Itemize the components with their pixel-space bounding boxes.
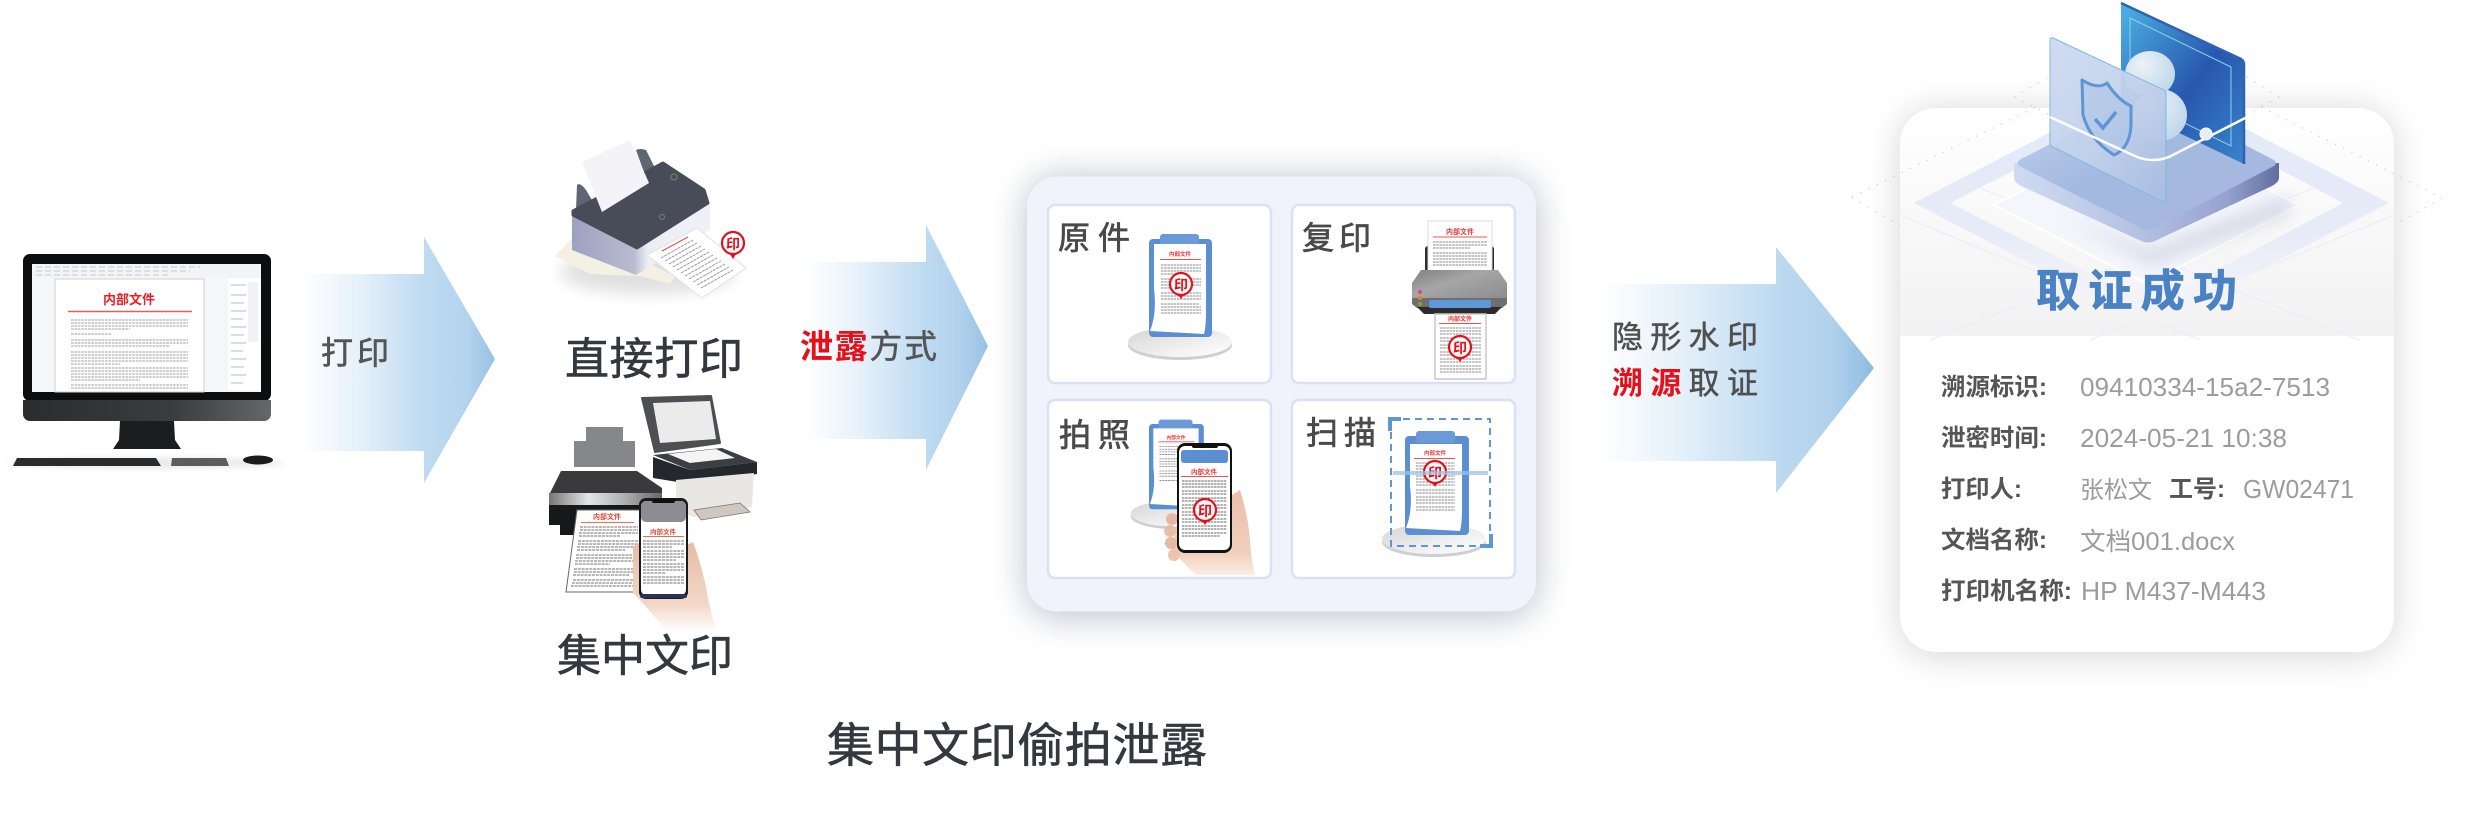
scanner tray [694,503,750,520]
direct print printer [555,140,746,298]
phone [639,498,688,599]
floating plate [1994,128,2299,284]
row: printer name: HP M437-M443 [2081,576,2266,606]
monitor chin [23,400,271,421]
dotted guide lines [1852,75,2442,226]
card body [1900,108,2394,652]
heading: central print photo leak: 集中文印偷拍泄露 [827,719,1207,772]
document title: 内部文件 [103,292,155,307]
clipboard on stand: 印 [1174,277,1188,293]
card label: 原件 [1058,220,1130,256]
large printer top [550,471,662,505]
card: photo [1048,400,1271,578]
card label: 拍照 [1059,417,1130,453]
scan corner bottom right [1480,534,1493,548]
row: printed by: 打印人: [1941,476,2022,503]
shield icon [2082,80,2131,155]
row: trace id [1941,372,2330,402]
card header [1900,108,2394,336]
trackpad [171,458,229,466]
row: printer name: 打印机名称: [1941,578,2072,605]
row: trace id: 溯源标识: [1941,374,2047,401]
desk shadow [6,457,286,469]
arrow label [1612,320,1758,401]
connection line [2050,112,2257,160]
dashed scan frame [1391,419,1490,546]
printed sheet [566,510,642,592]
row: leak time: 2024-05-21 10:38 [2080,423,2287,453]
watermark stamp [722,232,744,259]
connection node [2200,128,2212,140]
printed document [647,228,746,298]
phone [1177,443,1232,553]
row: leak time [1941,423,2287,453]
hand [1164,490,1255,575]
hand [633,542,717,632]
row: printed by [1941,474,2354,504]
sheet title: 内部文件 [593,512,621,521]
scanner glass [653,401,716,443]
arrow label: leak methods: 泄露方式 [800,328,937,365]
security illustration [1852,3,2442,340]
large printer band [549,493,662,507]
glass panel [2050,38,2166,202]
row: leak time: 泄密时间: [1941,424,2047,452]
clipboard behind phone [1131,420,1221,529]
panel shadow [1027,178,1536,616]
scan corner top left [1388,417,1401,431]
back panel [2121,3,2244,164]
line: traceability: 溯源取证 [1612,366,1758,401]
card: copy [1292,205,1515,383]
arrow: print [300,237,495,483]
platform [2014,96,2279,242]
phone: 内部文件 [1191,467,1218,476]
mouse [243,456,273,464]
phone title: 内部文件 [650,527,676,536]
row: printed by: 张松文 [2080,477,2152,504]
card shadow [1900,110,2394,656]
card label: 扫描 [1306,415,1376,451]
floor ring [1914,80,2389,326]
large printer lower [549,505,641,535]
clipboard on stand [1128,234,1232,360]
row: file name [1941,526,2236,556]
panel: leak methods [1027,176,1536,616]
copier illustration: 内部文件 [1446,227,1474,236]
label: central print: 集中文印 [557,632,733,681]
keyboard [13,458,161,466]
panel surface [1027,176,1536,612]
row: file name: 文档名称: [1941,526,2047,554]
central print devices [549,396,757,632]
scan line [1393,471,1488,475]
card title: 取证成功 [2036,267,2237,316]
printer mat [555,238,675,284]
watermark stamp: 印 [726,236,740,252]
label: direct print: 直接打印 [565,335,743,384]
clipboard behind phone: 内部文件 [1166,434,1186,441]
line: invisible watermark: 隐形水印 [1612,320,1758,355]
arrow: invisible watermark tracing [1600,247,1874,493]
copier illustration: 内部文件 [1448,315,1472,323]
computer with document [6,254,286,469]
row: printed by: GW02471 [2243,474,2354,504]
paper handles [576,149,657,216]
printer body side [572,203,710,275]
result details [1941,372,2354,606]
arrow: leak methods [805,225,988,470]
copier illustration: 印 [1453,340,1467,356]
scanner lid [642,396,720,452]
input sheet [582,140,649,212]
monitor screen [32,264,261,392]
monitor stand [113,421,181,449]
scanner top [653,448,757,470]
printer shadow [560,250,736,294]
card: scan [1292,400,1515,578]
card label: 复印 [1302,220,1371,256]
card: original [1048,205,1271,383]
printer top [573,163,708,248]
large printer tray [574,427,635,467]
arrow label: print: 打印 [321,335,389,371]
scanner body [653,457,757,484]
clipboard on stand: 内部文件 [1169,250,1191,258]
panel: forensics result [1852,3,2442,656]
row: file name: 文档001.docx [2080,528,2236,556]
phone: 印 [1198,503,1212,519]
clipboard being scanned [1382,431,1486,557]
platform shadow [2060,195,2290,265]
row: printed by: 工号: [2169,476,2225,503]
user silhouette [2125,51,2187,141]
clipboard being scanned: 印 [1428,465,1442,481]
control button [660,214,664,220]
floor grid [1900,180,2394,340]
monitor body [23,254,271,401]
clipboard being scanned: 内部文件 [1424,449,1446,457]
row: printer name [1941,576,2266,606]
copier illustration [1412,221,1507,379]
row: trace id: 09410334-15a2-7513 [2080,372,2330,402]
